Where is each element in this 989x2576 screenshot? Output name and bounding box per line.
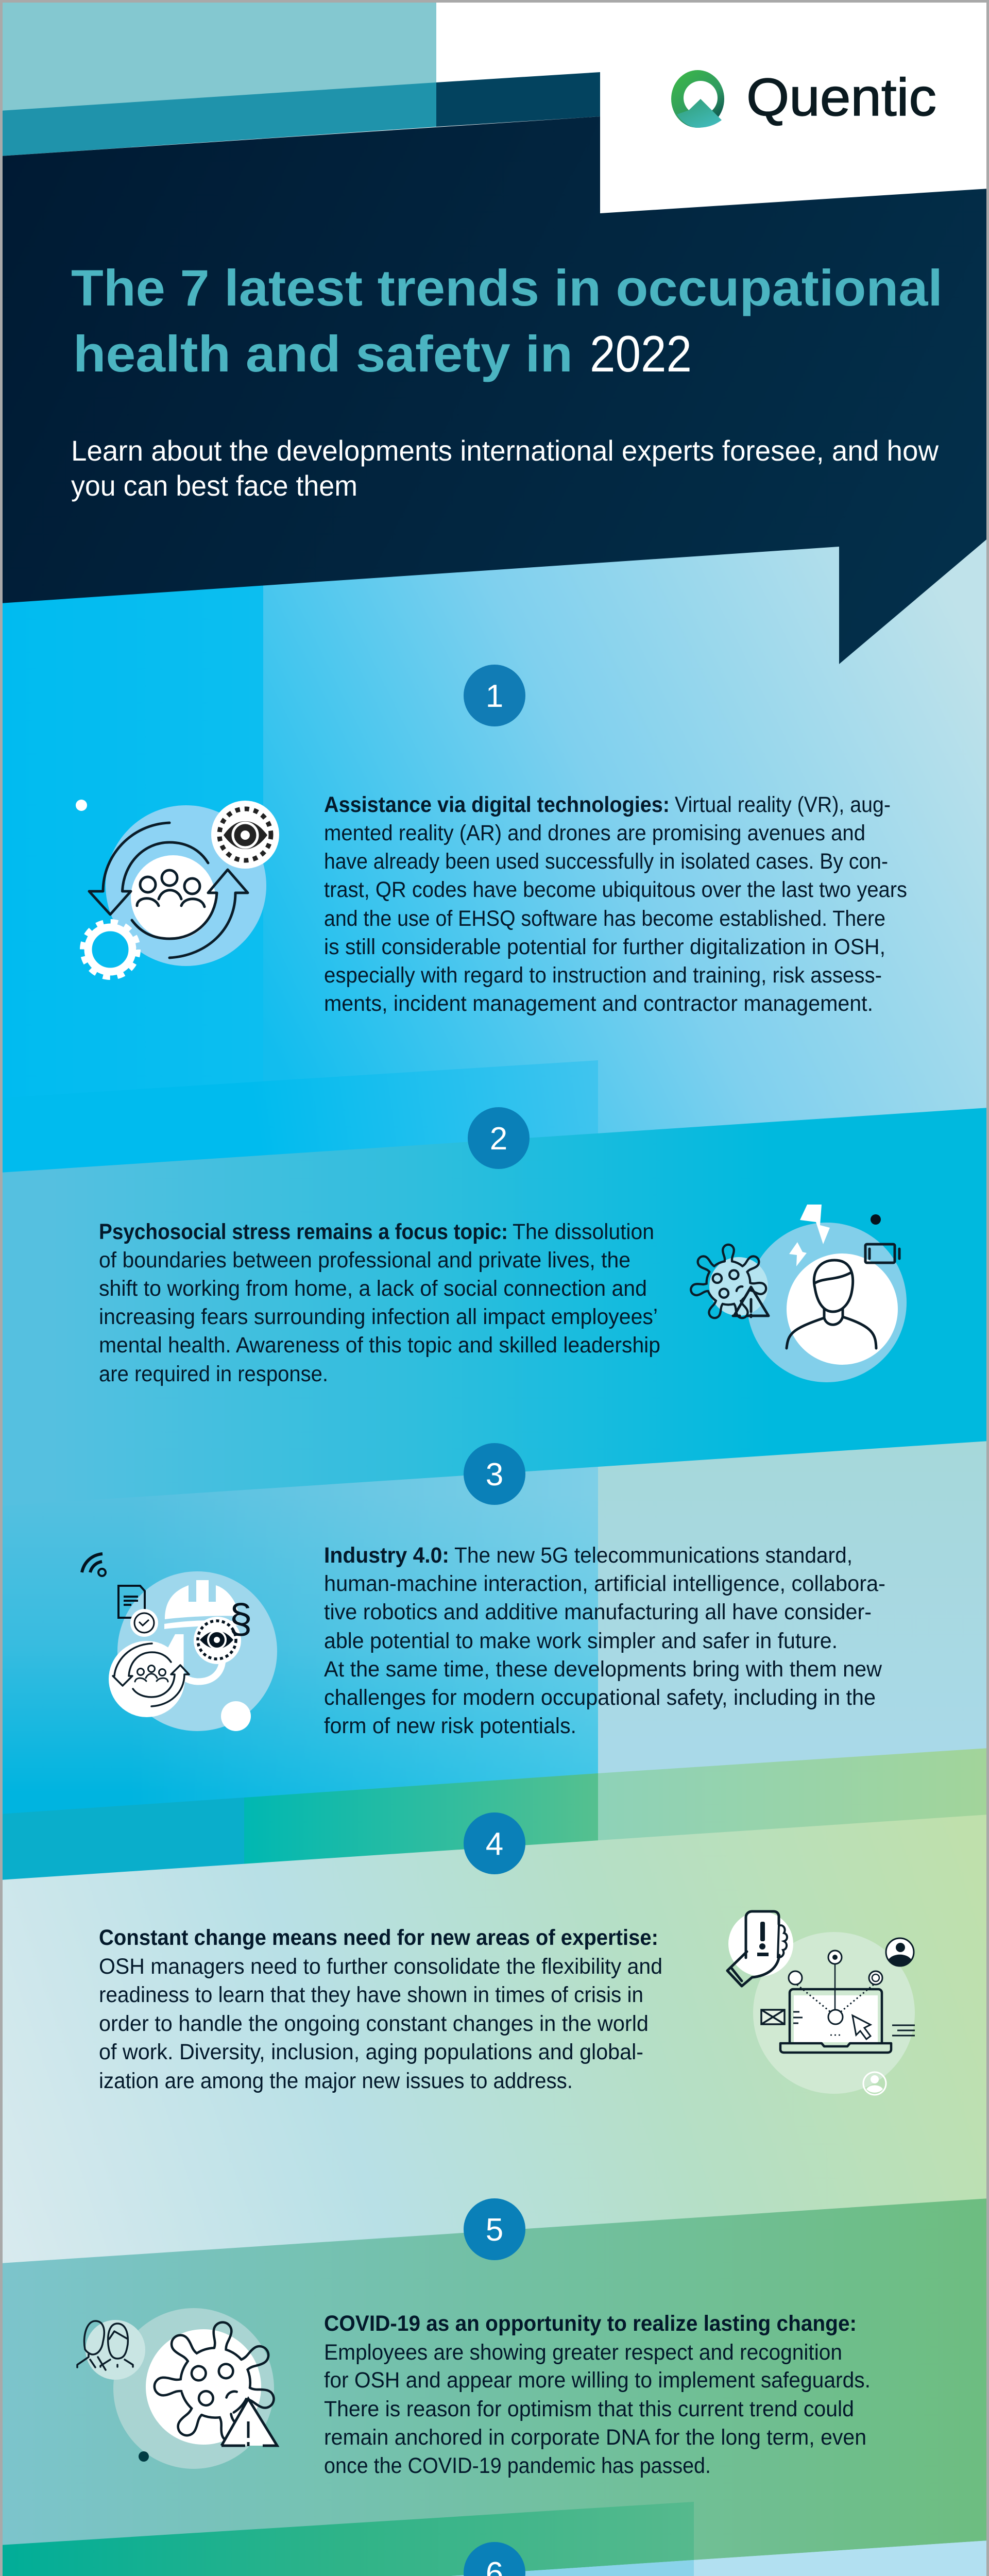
people xyxy=(140,877,156,892)
header: navy speech panel xyxy=(0,116,989,664)
text: trend 5 xyxy=(324,2311,871,2478)
text: trend 1: and the use of EHSQ software has become established. There xyxy=(324,906,885,931)
subtitle: you can best face them xyxy=(71,469,357,502)
logo mark xyxy=(671,70,724,128)
icon: industry 4.0 xyxy=(82,1554,277,1731)
text: trend 3: able potential to make work simpler and safer in future. xyxy=(324,1629,838,1653)
text: trend 4: order to handle the ongoing constant changes in the world xyxy=(99,2011,649,2036)
band: green strip above trend 4 xyxy=(0,1748,989,1880)
text: trend 4: readiness to learn that they have shown in times of crisis in xyxy=(99,1982,643,2007)
header: dark blue stripe xyxy=(436,72,600,127)
text: trend 1: trast, QR codes have become ubiquitous over the last two years xyxy=(324,877,907,902)
section sign: § xyxy=(229,1596,252,1641)
panel: trend 3 background left xyxy=(0,1467,598,1834)
text: trend 1: Virtual reality (VR), aug- xyxy=(675,792,891,817)
battery xyxy=(865,1244,895,1263)
panel: trend 5 background xyxy=(0,2198,989,2576)
phone and hand xyxy=(727,1911,779,1986)
text: trend 3: tive robotics and additive manufacturing all have consider- xyxy=(324,1600,872,1624)
text: trend 2: The dissolution xyxy=(513,1219,654,1244)
text: trend 5: for OSH and appear more willing to implement safeguards. xyxy=(324,2368,871,2393)
text: trend 3: At the same time, these developments bring with them new xyxy=(324,1657,882,1682)
person badge light xyxy=(863,2072,886,2095)
header: mid teal stripe xyxy=(0,82,436,156)
virus xyxy=(688,1245,767,1324)
envelope xyxy=(761,2010,785,2024)
text: trend 5: remain anchored in corporate DNA for the long term, even xyxy=(324,2425,866,2450)
logo: Quentic xyxy=(671,67,936,128)
icon: constant change xyxy=(727,1911,915,2095)
number badge 4 xyxy=(464,1812,525,1874)
helmet xyxy=(164,1580,238,1629)
cycle arrows xyxy=(113,1643,171,1686)
panel: trend 2 background xyxy=(0,1108,989,1510)
text: trend 4: of work. Diversity, inclusion, aging populations and global- xyxy=(99,2040,643,2064)
title: The 7 latest trends in occupational xyxy=(71,259,943,316)
cycle arrows xyxy=(89,823,208,914)
text: trend 4: OSH managers need to further consolidate the flexibility and xyxy=(99,1954,662,1979)
icon: COVID-19 xyxy=(77,2308,285,2469)
text: trend 5: Employees are showing greater respect and recognition xyxy=(324,2340,842,2365)
text: trend 5: once the COVID-19 pandemic has passed. xyxy=(324,2453,711,2478)
panel: trend 6 background xyxy=(0,2540,989,2576)
text: trend 5: COVID-19 as an opportunity to realize lasting change: xyxy=(324,2311,857,2336)
text: trend 1: mented reality (AR) and drones are promising avenues and xyxy=(324,821,865,845)
text: trend 2: are required in response. xyxy=(99,1362,328,1386)
person badge dark xyxy=(886,1938,914,1966)
header: teal block xyxy=(0,0,436,118)
text: trend 3: form of new risk potentials. xyxy=(324,1714,576,1738)
text: trend 3: human-machine interaction, artificial intelligence, collabora- xyxy=(324,1571,885,1596)
document xyxy=(118,1586,145,1618)
number badge 4: 4 xyxy=(486,1826,503,1862)
band: dark green strip below trend 5 xyxy=(0,2502,694,2576)
text: trend 1: have already been used successfully in isolated cases. By con- xyxy=(324,849,888,874)
number badge 3 xyxy=(464,1443,525,1505)
eye badge xyxy=(211,801,279,869)
number badge 1 xyxy=(464,665,525,726)
icon: psychosocial stress xyxy=(688,1205,907,1382)
text: trend 2: of boundaries between professional and private lives, the xyxy=(99,1248,630,1273)
subtitle: Learn about the developments international experts foresee, and how xyxy=(71,434,939,467)
title: health and safety in xyxy=(73,325,573,382)
text: trend 3: challenges for modern occupational safety, including in the xyxy=(324,1685,876,1710)
text: trend 1 xyxy=(324,792,907,1016)
text: trend 2: Psychosocial stress remains a focus topic: xyxy=(99,1219,508,1244)
people with masks xyxy=(77,2321,106,2370)
icon: digital technologies xyxy=(76,800,279,977)
text: trend 2 xyxy=(99,1219,660,1386)
panel: trend 4 background xyxy=(0,1815,989,2277)
text: trend 4 xyxy=(99,1925,662,2093)
number badge 3: 3 xyxy=(486,1457,503,1493)
laptop and network xyxy=(780,1989,891,2053)
text: trend 1: ments, incident management and contractor management. xyxy=(324,991,873,1016)
title: 2022 xyxy=(590,325,692,382)
number badge 2: 2 xyxy=(490,1121,507,1157)
logo wordmark: Quentic xyxy=(746,67,936,127)
panel: trend 3 background right xyxy=(598,1441,989,1803)
text: trend 3: The new 5G telecommunications standard, xyxy=(454,1543,852,1568)
eye xyxy=(198,1621,236,1659)
lightning bolts xyxy=(800,1205,830,1244)
header: white logo area xyxy=(436,0,989,216)
number badge 5 xyxy=(464,2198,525,2260)
text: trend 1: is still considerable potential for further digitalization in OSH, xyxy=(324,935,885,959)
subtitle xyxy=(71,434,939,502)
gear xyxy=(83,922,138,977)
text: trend 1: especially with regard to instruction and training, risk assess- xyxy=(324,963,882,988)
text: trend 4: Constant change means need for new areas of expertise: xyxy=(99,1925,658,1950)
warning triangle xyxy=(733,1287,769,1317)
text: trend 4: ization are among the major new issues to address. xyxy=(99,2069,573,2093)
number badge 6 xyxy=(464,2542,525,2576)
text: trend 1: Assistance via digital technologies: xyxy=(324,792,670,817)
title xyxy=(71,259,943,382)
number badge 1: 1 xyxy=(486,679,503,714)
text: trend 2: shift to working from home, a lack of social connection and xyxy=(99,1276,647,1301)
number badge 2 xyxy=(468,1107,530,1169)
virus xyxy=(143,2313,285,2455)
text: trend 2: increasing fears surrounding infection all impact employees’ xyxy=(99,1304,658,1329)
warning triangle xyxy=(221,2399,277,2446)
text: trend 3: Industry 4.0: xyxy=(324,1543,449,1568)
text: trend 2: mental health. Awareness of this topic and skilled leadership xyxy=(99,1333,660,1358)
text: trend 5: There is reason for optimism that this current trend could xyxy=(324,2397,854,2421)
number badge 5: 5 xyxy=(486,2212,503,2248)
wifi xyxy=(82,1554,103,1572)
background: section 1 xyxy=(0,515,989,1185)
person xyxy=(787,1260,876,1348)
text: trend 3 xyxy=(324,1543,885,1738)
